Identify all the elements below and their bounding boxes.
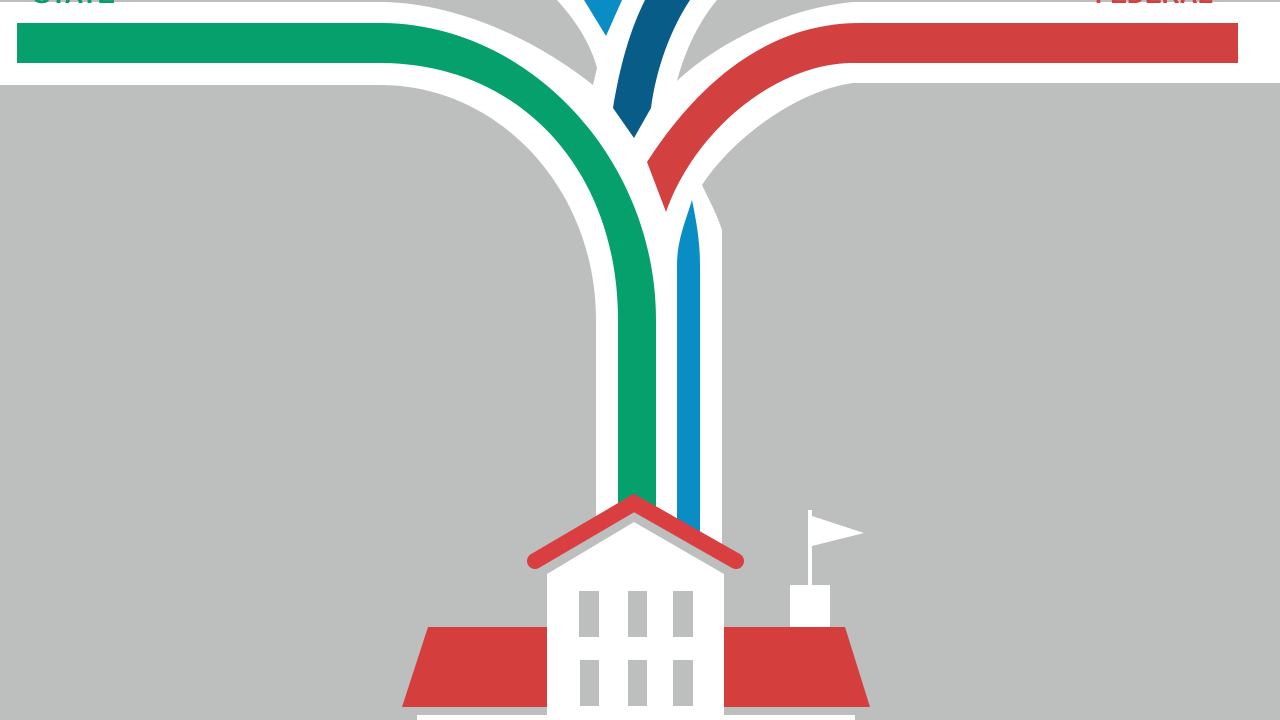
windows — [579, 591, 693, 706]
stream: dark blue — [613, 0, 690, 138]
stream: federal red — [647, 23, 1238, 212]
stream: lower blue — [677, 200, 700, 540]
school building — [402, 503, 870, 720]
main roof — [535, 503, 736, 561]
base — [417, 715, 855, 720]
stream: state green — [17, 23, 656, 520]
stream: upper light blue — [584, 0, 622, 36]
left wing roof — [402, 627, 547, 707]
roof shadow — [520, 507, 750, 600]
right wing roof — [724, 627, 870, 707]
flag tower — [790, 585, 830, 627]
main block — [547, 522, 724, 720]
flag — [808, 510, 864, 585]
